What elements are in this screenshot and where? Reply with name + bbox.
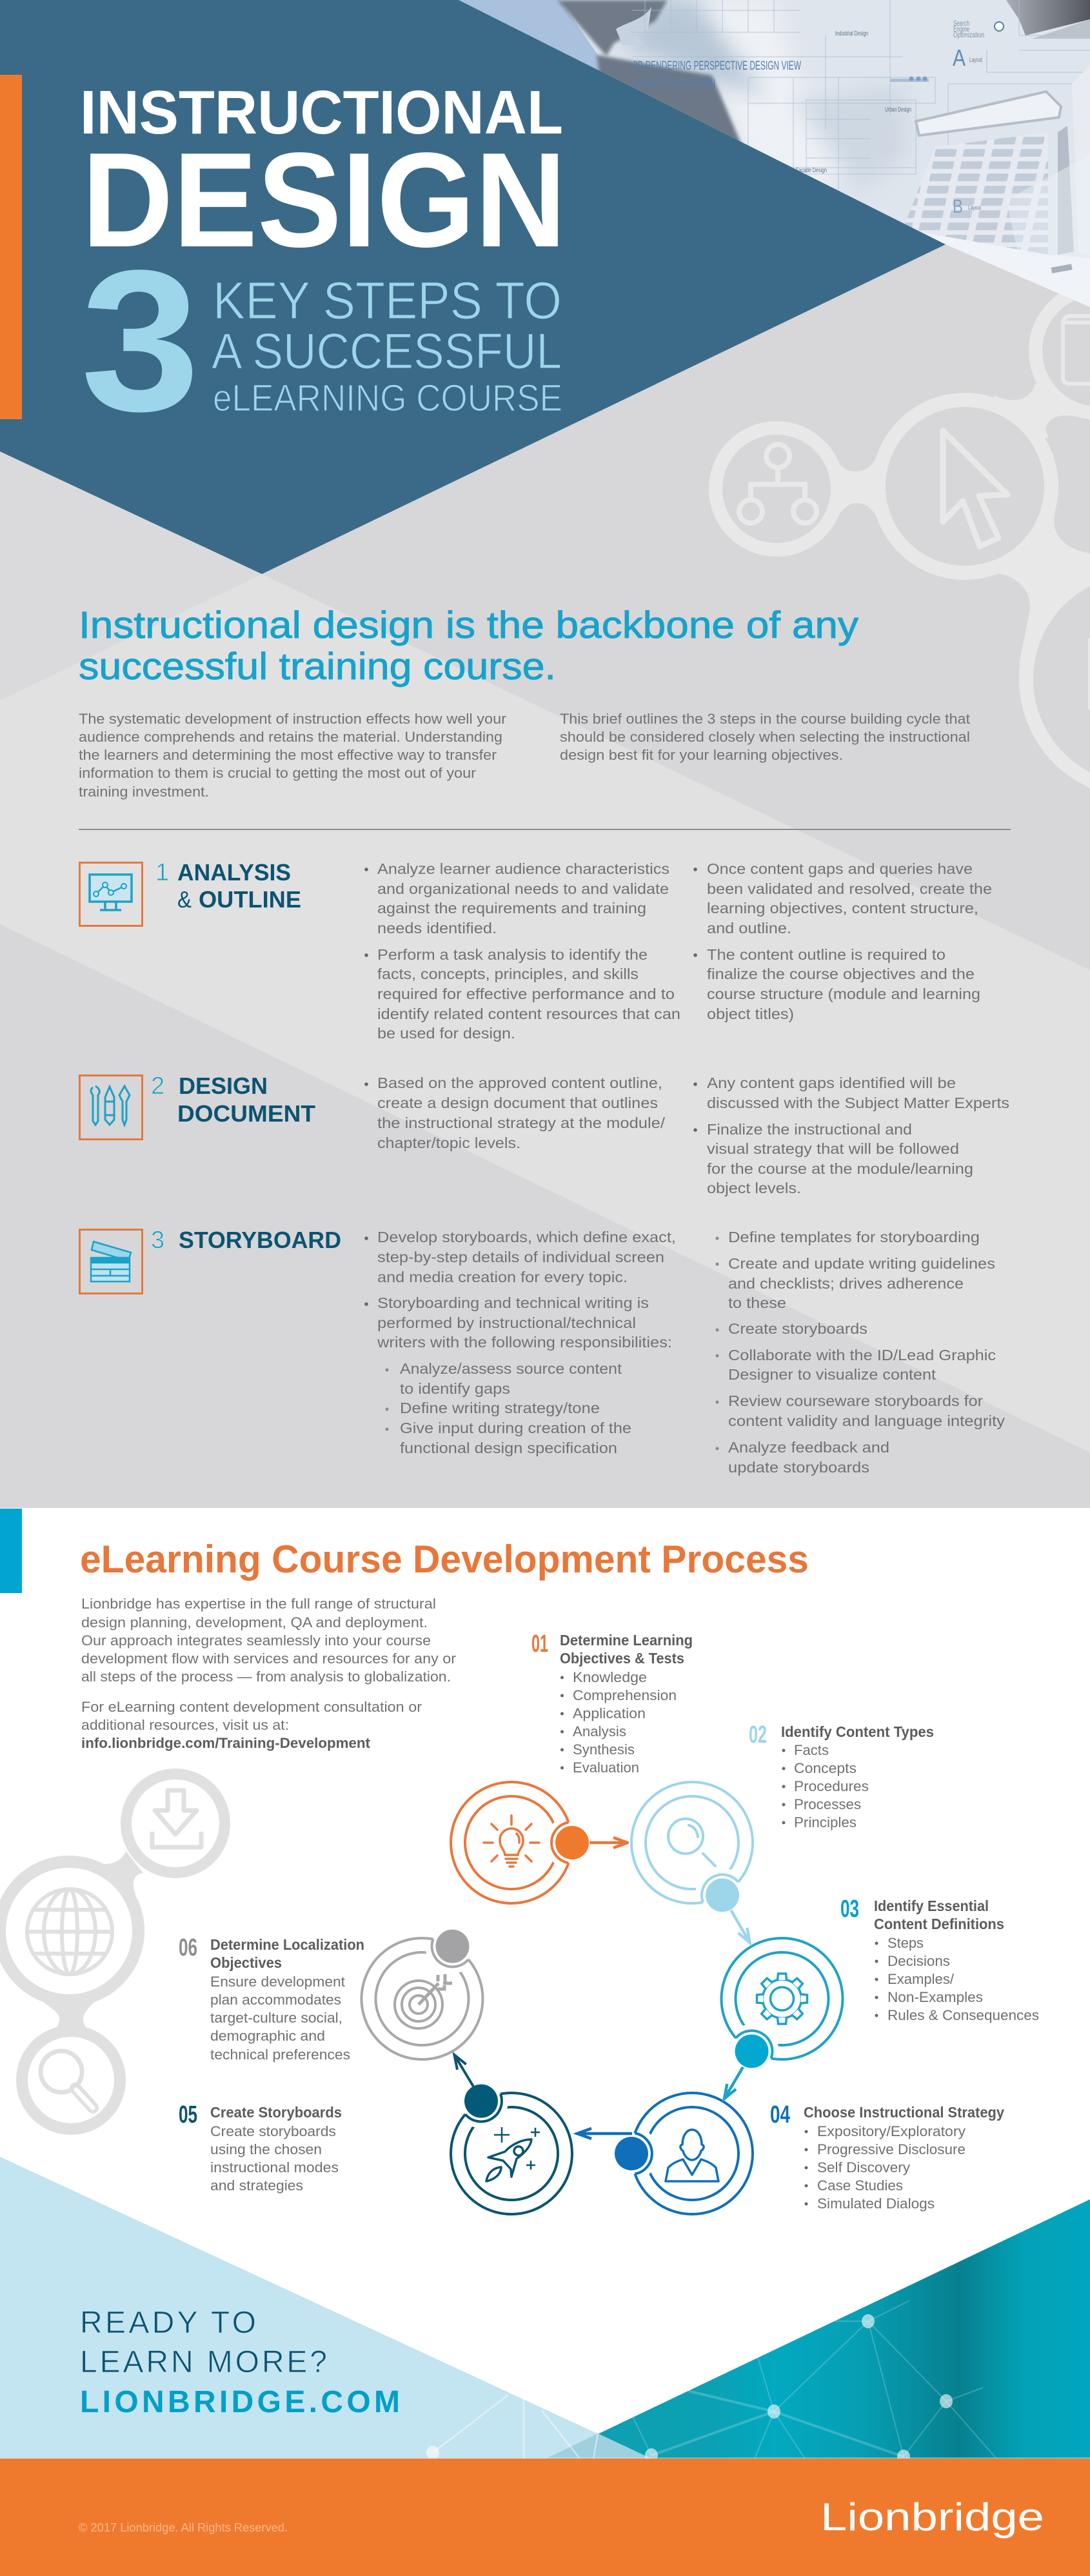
list: step 1 left column xyxy=(364,860,680,1042)
text block: step 04 xyxy=(770,2101,1004,2212)
list: step 3 left column: writers with the following responsibilities: xyxy=(377,1334,672,1351)
text block: step 03 xyxy=(840,1896,1039,2023)
text block: step 04: Case Studies xyxy=(817,2177,903,2194)
icon: tree diagram xyxy=(739,444,817,523)
text block: step 03: Content Definitions xyxy=(874,1916,1004,1932)
text block: step 03: Identify Essential xyxy=(874,1897,989,1914)
text block: step 02: Principles xyxy=(794,1814,857,1830)
panel: bottom triangles and network xyxy=(0,2157,1090,2464)
list: step 1 left column: required for effective performance and to xyxy=(377,986,675,1002)
icon: target xyxy=(395,1974,452,2028)
text block: process intro: all steps of the process — from analysis to globalization. xyxy=(81,1669,451,1685)
list: step 3 left column: and media creation for every topic. xyxy=(377,1269,628,1285)
text block: step 02 xyxy=(749,1721,934,1830)
list: step 3 right column: Review courseware storyboards for xyxy=(728,1392,983,1409)
list: step 2 right column: visual strategy that will be followed xyxy=(707,1140,959,1157)
list: step 3 right column: and checklists; drives adherence xyxy=(728,1275,964,1292)
text block: intro left: audience comprehends and retains the material. Understanding xyxy=(79,729,502,745)
arrow: step 1 to 2 xyxy=(590,1838,628,1848)
list: step 1 left column: facts, concepts, principles, and skills xyxy=(377,966,639,982)
list: step 3 right column: Designer to visualize content xyxy=(728,1366,936,1383)
title: INSTRUCTIONAL xyxy=(80,78,563,147)
list: step 1 left column: Analyze learner audience characteristics xyxy=(377,860,669,877)
icon: monitor chart xyxy=(80,863,142,926)
text block: step 06: demographic and xyxy=(210,2028,325,2044)
text block: step 01: Synthesis xyxy=(573,1741,635,1758)
text block: step 01: Determine Learning xyxy=(560,1632,693,1649)
text block: step 05: Create Storyboards xyxy=(210,2104,342,2121)
list: step 2 right column: Finalize the instructional and xyxy=(707,1121,912,1138)
list: step 3 left column: Analyze/assess source content xyxy=(400,1360,622,1377)
text block: step 02: Facts xyxy=(794,1742,829,1758)
text block: step 04: Choose Instructional Strategy xyxy=(804,2104,1004,2121)
text block: step 01: Knowledge xyxy=(573,1669,647,1685)
call to action: LEARN MORE? xyxy=(80,2345,327,2379)
list: step 3 right column: update storyboards xyxy=(728,1459,869,1476)
list: step 1 right column: been validated and resolved, create the xyxy=(707,880,992,897)
text block: intro left: information to them is crucial to getting the most out of your xyxy=(79,765,476,781)
icon: clapperboard xyxy=(80,1229,142,1294)
list: step 3 left column: functional design specification xyxy=(400,1440,617,1456)
list: step 2 right column: object levels. xyxy=(707,1180,801,1196)
ring: step 2 xyxy=(609,1760,788,1949)
list: step 1 right column: Once content gaps and queries have xyxy=(707,860,973,877)
call to action: READY TO xyxy=(80,2306,256,2340)
icon: gear xyxy=(757,1974,808,2024)
text block: step 02: Concepts xyxy=(794,1760,857,1776)
heading: analysis and outline: ANALYSIS xyxy=(177,859,291,886)
text block: step 03: Steps xyxy=(887,1935,924,1951)
list: step 3 left column xyxy=(364,1229,676,1456)
call to action xyxy=(80,2306,400,2419)
footer xyxy=(0,2457,1090,2576)
icon: pen tools xyxy=(80,1076,142,1139)
photo: hands on laptop: Facade Design xyxy=(796,167,827,174)
ring: step 4 xyxy=(604,2093,753,2214)
list: step 1 right column: object titles) xyxy=(707,1006,794,1022)
text block: step 03: Rules & Consequences xyxy=(887,2007,1039,2023)
photo: hands on laptop: Engine xyxy=(953,25,969,34)
arrow: step 5 to 6 xyxy=(450,2052,478,2089)
panel: step 3 storyboard xyxy=(80,1227,1006,1476)
icon: lightbulb xyxy=(484,1816,539,1867)
text block: step 02: 02 xyxy=(749,1721,767,1749)
icon: download xyxy=(152,1790,201,1847)
arrow: step 3 to 4 xyxy=(720,2065,748,2101)
text block: step 02: Procedures xyxy=(794,1778,869,1794)
subtitle: 3 key steps: KEY STEPS TO xyxy=(213,272,562,330)
heading: design document: 2 xyxy=(151,1073,164,1100)
list: step 1 right column: course structure (module and learning xyxy=(707,986,980,1002)
list: step 3 left column: step-by-step details of individual screen xyxy=(377,1249,664,1265)
heading: analysis and outline: & xyxy=(177,886,192,913)
text block: step 04: Progressive Disclosure xyxy=(817,2141,966,2157)
text block: process intro: info.lionbridge.com/Training-Development xyxy=(81,1735,371,1751)
list: step 3 left column: to identify gaps xyxy=(400,1380,510,1397)
heading: backbone statement xyxy=(79,604,858,688)
heading: analysis and outline xyxy=(155,859,301,913)
icon: magnifier xyxy=(41,2051,93,2108)
call to action: LIONBRIDGE.COM xyxy=(80,2385,400,2419)
icon: magnifier xyxy=(668,1819,715,1866)
text block: intro right: This brief outlines the 3 steps in the course building cycle that xyxy=(560,711,970,727)
text block: step 05: Create storyboards xyxy=(210,2123,336,2139)
list: step 3 left column: Develop storyboards, which define exact, xyxy=(377,1229,676,1245)
list: step 1 left column: against the requirements and training xyxy=(377,900,646,916)
text block: step 05: using the chosen xyxy=(210,2141,322,2157)
list: step 1 left column: and organizational needs to and validate xyxy=(377,880,669,897)
subtitle: 3 key steps: eLEARNING COURSE xyxy=(213,377,562,419)
text block: process intro: Lionbridge has expertise in the full range of structural xyxy=(81,1596,436,1612)
text block: step 01: Objectives & Tests xyxy=(560,1650,684,1667)
heading: analysis and outline: OUTLINE xyxy=(199,886,301,913)
panel: gray background xyxy=(0,0,1090,1508)
list: step 2 left column: the instructional strategy at the module/ xyxy=(377,1115,666,1131)
list: step 1 right column: and outline. xyxy=(707,920,791,936)
icon: folder xyxy=(1063,316,1090,384)
list: step 3 right column: Analyze feedback and xyxy=(728,1439,889,1456)
text block: step 04: Simulated Dialogs xyxy=(817,2195,935,2212)
decorative bubbles: top right xyxy=(709,282,1090,798)
photo: hands on laptop: Layout xyxy=(968,204,981,211)
icon: person xyxy=(666,2130,718,2181)
text block: step 04: 04 xyxy=(770,2101,790,2128)
list: step 1 right column xyxy=(693,860,992,1022)
text block: step 01: Evaluation xyxy=(573,1759,639,1776)
panel: step 2 design document xyxy=(80,1073,1009,1196)
icon: rocket xyxy=(486,2127,540,2181)
ring: step 6 xyxy=(339,1892,519,2081)
list: step 3 right column: to these xyxy=(728,1294,786,1311)
arrow: step 2 to 3 xyxy=(727,1908,754,1945)
photo: hands on laptop: A xyxy=(953,45,966,71)
heading: design document: DESIGN xyxy=(179,1073,268,1099)
list: step 2 right column: discussed with the Subject Matter Experts xyxy=(707,1095,1009,1111)
photo: hands on laptop: Industrial Design xyxy=(835,30,868,37)
photo: hands on laptop: Layout xyxy=(969,57,982,64)
list: step 3 left column: Define writing strategy/tone xyxy=(400,1400,600,1416)
text block: step 03: Decisions xyxy=(887,1953,950,1969)
subtitle: 3 key steps: A SUCCESSFUL xyxy=(212,322,562,379)
panel: step 1 analysis and outline xyxy=(80,859,992,1042)
list: step 3 right column: Create and update writing guidelines xyxy=(728,1255,995,1272)
text block: process intro: For eLearning content development consultation or xyxy=(81,1699,422,1715)
text block: intro left xyxy=(79,711,506,800)
list: step 2 right column: for the course at the module/learning xyxy=(707,1160,973,1177)
text block: step 05: and strategies xyxy=(210,2177,303,2194)
icon: cursor arrow xyxy=(943,431,1007,546)
text block: step 06: plan accommodates xyxy=(210,1992,341,2008)
list: step 1 right column: The content outline is required to xyxy=(707,946,946,963)
subtitle: 3 key steps: 3 xyxy=(81,229,200,453)
heading: design document: DOCUMENT xyxy=(177,1100,315,1127)
heading: storyboard: 3 xyxy=(151,1227,164,1254)
list: step 1 left column: identify related content resources that can xyxy=(377,1006,680,1022)
decorative bubbles: left xyxy=(0,1769,230,2135)
logo: Lionbridge: Lionbridge xyxy=(820,2495,1044,2539)
text block: step 01: Analysis xyxy=(573,1723,626,1739)
text block: step 04: Expository/Exploratory xyxy=(817,2123,966,2139)
photo: hands on laptop xyxy=(451,0,1090,310)
text block: step 06: Objectives xyxy=(210,1954,282,1971)
title: DESIGN xyxy=(82,125,566,275)
heading: design document xyxy=(151,1073,315,1127)
list: step 1 left column: be used for design. xyxy=(377,1025,515,1042)
panel: process cycle diagram xyxy=(339,1760,865,2236)
list: step 3 left column: Storyboarding and technical writing is xyxy=(377,1294,649,1311)
text block: intro left: training investment. xyxy=(79,784,209,800)
text block: step 06: target-culture social, xyxy=(210,2010,342,2026)
list: step 2 left column: chapter/topic levels. xyxy=(377,1134,520,1151)
photo: hands on laptop: 3D RENDERING PERSPECTIVE DESIGN VIEW xyxy=(633,59,801,73)
text block: step 06: Determine Localization xyxy=(210,1936,364,1953)
list: step 2 left column xyxy=(364,1075,666,1151)
orange side bar xyxy=(0,75,22,419)
arrow: step 4 to 5 xyxy=(577,2128,632,2139)
text block: step 02: Identify Content Types xyxy=(781,1723,934,1740)
text block: intro right: should be considered closely when selecting the instructional xyxy=(560,729,970,745)
text block: step 05 xyxy=(179,2101,342,2194)
ring: step 5 xyxy=(415,2047,594,2236)
text block: step 01: Comprehension xyxy=(573,1687,677,1703)
list: step 3 right column: Define templates for storyboarding xyxy=(728,1229,980,1245)
list: step 1 left column: needs identified. xyxy=(377,920,497,936)
photo: hands on laptop: LAYOUT PLAN DESIGN xyxy=(631,77,715,91)
text block: step 05: 05 xyxy=(179,2101,197,2128)
subtitle: 3 key steps xyxy=(81,229,562,453)
list: step 3 right column: Collaborate with the ID/Lead Graphic xyxy=(728,1347,996,1363)
text block: step 03: 03 xyxy=(840,1896,859,1923)
text block: step 03: Examples/ xyxy=(887,1971,955,1987)
text block: step 06: Ensure development xyxy=(210,1974,345,1990)
list: step 1 left column: Perform a task analysis to identify the xyxy=(377,946,648,963)
list: step 3 right column: content validity and language integrity xyxy=(728,1412,1006,1429)
icon: globe xyxy=(27,1889,112,1974)
text block: intro right xyxy=(560,711,970,763)
text block: step 06: technical preferences xyxy=(210,2046,350,2063)
list: step 3 left column: Give input during creation of the xyxy=(400,1420,631,1436)
text block: step 01 xyxy=(531,1630,693,1776)
photo: hands on laptop: Search xyxy=(953,19,969,28)
text block: step 06: 06 xyxy=(179,1934,197,1961)
heading: backbone statement: successful training course. xyxy=(79,646,556,688)
heading: process title: eLearning Course Development Process xyxy=(80,1538,809,1581)
heading: analysis and outline: 1 xyxy=(155,859,169,886)
blue side bar xyxy=(0,1509,22,1593)
photo: hands on laptop: Optimization xyxy=(953,30,984,39)
text block: step 06 xyxy=(179,1934,364,2063)
list: step 1 right column: learning objectives, content structure, xyxy=(707,900,978,916)
list: step 2 left column: create a design document that outlines xyxy=(377,1095,658,1111)
heading: storyboard: STORYBOARD xyxy=(179,1227,341,1253)
text block: process intro: Our approach integrates seamlessly into your course xyxy=(81,1632,431,1649)
list: step 3 right column: Create storyboards xyxy=(728,1320,867,1337)
list: step 2 right column: Any content gaps identified will be xyxy=(707,1075,956,1091)
list: step 1 right column: finalize the course objectives and the xyxy=(707,966,975,982)
text block: step 04: Self Discovery xyxy=(817,2159,910,2175)
list: step 3 left column: performed by instructional/technical xyxy=(377,1314,636,1331)
panel: white process section xyxy=(0,1508,1090,2462)
text block: intro right: design best fit for your learning objectives. xyxy=(560,747,843,763)
photo: hands on laptop: Urban Design xyxy=(885,106,911,114)
text block: process intro: development flow with services and resources for any or xyxy=(81,1650,456,1667)
heading: backbone statement: Instructional design is the backbone of any xyxy=(79,604,858,646)
text block: step 05: instructional modes xyxy=(210,2159,339,2175)
text block: process intro: design planning, development, QA and deployment. xyxy=(81,1614,428,1630)
text block: process intro xyxy=(81,1596,456,1751)
panel: hero background xyxy=(0,0,946,574)
list: step 2 right column xyxy=(693,1075,1009,1196)
text block: intro left: the learners and determining the most effective way to transfer xyxy=(79,747,497,763)
text block: step 01: 01 xyxy=(531,1630,548,1658)
text block: step 02: Processes xyxy=(794,1796,861,1812)
copyright: © 2017 Lionbridge. All Rights Reserved. xyxy=(79,2521,288,2534)
text block: intro left: The systematic development of instruction effects how well your xyxy=(79,711,506,727)
text block: step 01: Application xyxy=(573,1705,646,1721)
text block: process intro: additional resources, visit us at: xyxy=(81,1717,289,1733)
list: step 3 right column xyxy=(716,1229,1006,1476)
text block: step 03: Non-Examples xyxy=(887,1989,983,2005)
photo: hands on laptop: B xyxy=(953,196,963,217)
ring: step 3 xyxy=(686,1916,865,2105)
list: step 2 left column: Based on the approved content outline, xyxy=(377,1075,662,1091)
ring: step 1 xyxy=(451,1782,599,1903)
